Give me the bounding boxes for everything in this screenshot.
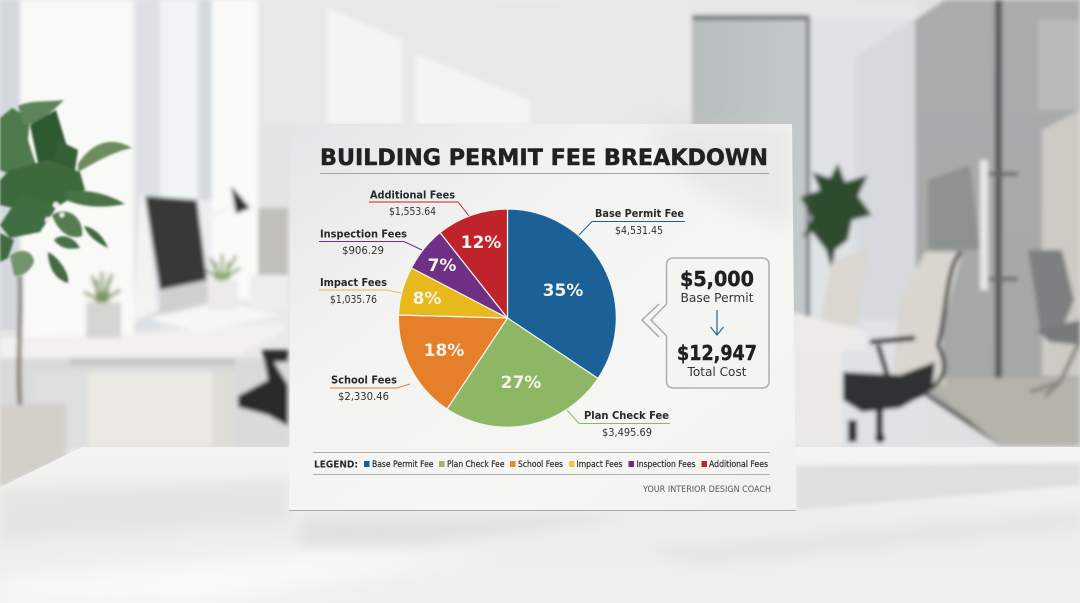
label: school fees: School Fees xyxy=(331,374,397,386)
label: impact fees: Impact Fees xyxy=(320,277,387,289)
legend: Impact Fees xyxy=(576,460,623,470)
slice: inspection fees 7% xyxy=(412,232,508,318)
lamp xyxy=(231,186,250,214)
slice: school fees 18% xyxy=(398,315,508,409)
right plant xyxy=(800,163,872,272)
monitor xyxy=(145,196,207,290)
large plant leaves xyxy=(0,100,132,283)
pie percentages: 18% xyxy=(424,341,464,361)
label: base permit fee: Base Permit Fee xyxy=(595,208,684,220)
slice: plan check fee 27% xyxy=(447,318,598,427)
label: inspection fees: $906.29 xyxy=(342,245,384,257)
middle glass door xyxy=(692,18,810,318)
label: base permit fee: $4,531.45 xyxy=(615,225,663,237)
title: BUILDING PERMIT FEE BREAKDOWN xyxy=(320,145,768,171)
label: impact fees: $1,035.76 xyxy=(330,294,377,306)
right desk xyxy=(792,312,866,350)
black chair left xyxy=(238,350,288,426)
pie percentages: 27% xyxy=(501,373,541,393)
panel: fee breakdown card xyxy=(289,124,796,510)
pie percentages: 8% xyxy=(413,289,441,309)
legend: Inspection Fees xyxy=(636,460,696,470)
legend: LEGEND: xyxy=(314,460,358,470)
label: plan check fee: Plan Check Fee xyxy=(584,410,669,422)
pie chart xyxy=(398,209,616,427)
legend xyxy=(313,452,770,474)
far right chair xyxy=(1028,250,1074,330)
slice: impact fees 8% xyxy=(398,268,508,318)
legend: Base Permit Fee xyxy=(372,460,434,470)
label: impact fees xyxy=(319,277,401,306)
label: additional fees xyxy=(369,190,469,218)
label: school fees xyxy=(330,374,410,403)
label: base permit fee xyxy=(579,208,685,237)
slice: additional fees 12% xyxy=(440,209,508,318)
white pillar xyxy=(855,18,918,320)
back wall with light patches xyxy=(262,0,692,124)
right chairs xyxy=(820,248,868,325)
label: inspection fees xyxy=(319,228,422,257)
label: plan check fee xyxy=(567,410,670,439)
large plant pot and stem xyxy=(0,403,66,488)
far background monitors and desk left xyxy=(0,358,290,448)
pie percentages: 12% xyxy=(461,233,501,253)
callout: base permit to total cost: Total Cost xyxy=(686,365,747,379)
callout value: base permit: $5,000 xyxy=(680,267,754,291)
label: plan check fee: $3,495.69 xyxy=(602,427,652,439)
pie percentages xyxy=(413,233,583,393)
icon: down arrow xyxy=(710,310,724,335)
legend: School Fees xyxy=(518,460,564,470)
slice: base permit fee 35% xyxy=(508,209,616,378)
label: school fees: $2,330.46 xyxy=(338,391,389,403)
legend: Additional Fees xyxy=(709,460,769,470)
small plants and pots xyxy=(86,302,121,338)
pie percentages: 35% xyxy=(543,281,583,301)
label: additional fees: Additional Fees xyxy=(370,190,455,202)
right room ceiling and walls xyxy=(692,0,917,20)
callout: base permit to total cost xyxy=(642,258,769,388)
footer credit: YOUR INTERIOR DESIGN COACH xyxy=(642,485,771,495)
left windows xyxy=(0,0,20,330)
legend: Plan Check Fee xyxy=(447,460,504,470)
callout value: total cost: $12,947 xyxy=(677,341,757,365)
pie percentages: 7% xyxy=(428,256,456,276)
table surface xyxy=(0,447,1080,603)
second monitor xyxy=(258,208,288,280)
label: inspection fees: Inspection Fees xyxy=(320,228,407,240)
label: additional fees: $1,553.64 xyxy=(389,206,436,218)
glass partition right xyxy=(915,0,1080,446)
callout: base permit to total cost: Base Permit xyxy=(680,291,754,305)
